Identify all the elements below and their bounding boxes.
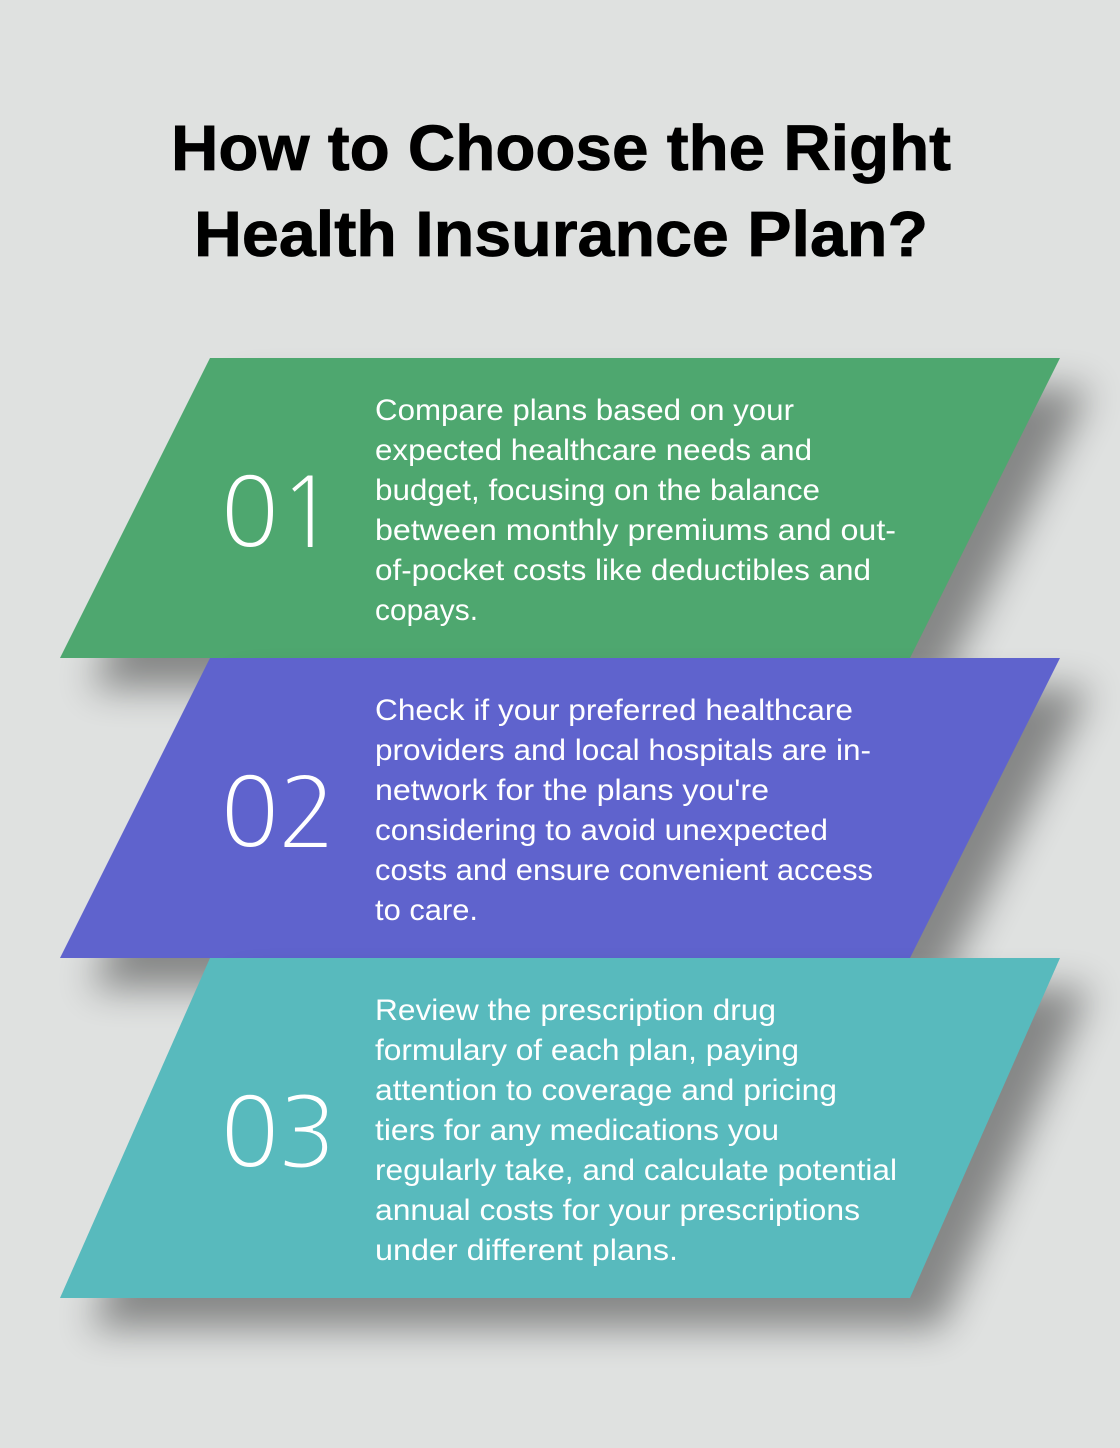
step 2 text: costs and ensure convenient access [375, 854, 873, 887]
title: Health Insurance Plan? [194, 198, 928, 270]
step 3 text [375, 994, 897, 1267]
step 3 text: regularly take, and calculate potential [375, 1154, 897, 1187]
step 3 text: annual costs for your prescriptions [375, 1194, 860, 1227]
step 3 text: Review the prescription drug [375, 994, 776, 1027]
step 1 green parallelogram [60, 358, 1060, 658]
step 3 text: attention to coverage and pricing [375, 1074, 837, 1107]
step 2 purple parallelogram [60, 658, 1060, 958]
step 1 text: copays. [375, 594, 478, 627]
step 1 text: of-pocket costs like deductibles and [375, 554, 871, 587]
step 3 text: under different plans. [375, 1234, 678, 1267]
step 2 text: providers and local hospitals are in- [375, 734, 871, 767]
step 1 text [375, 394, 896, 627]
step 2 text: network for the plans you're [375, 774, 769, 807]
panel: step 2 [60, 658, 1090, 988]
step 1 text: expected healthcare needs and [375, 434, 812, 467]
step 2 text: Check if your preferred healthcare [375, 694, 853, 727]
panel: step 3 [60, 958, 1090, 1328]
title [171, 112, 951, 270]
step 1 text: budget, focusing on the balance [375, 474, 820, 507]
panel: step 1 [60, 358, 1090, 688]
step 3 text: tiers for any medications you [375, 1114, 779, 1147]
step 2 text: considering to avoid unexpected [375, 814, 828, 847]
title: How to Choose the Right [171, 112, 951, 184]
step 2 number: 02 [220, 764, 335, 862]
step 2 text [375, 694, 873, 927]
step 2 text: to care. [375, 894, 478, 927]
step 3 text: formulary of each plan, paying [375, 1034, 799, 1067]
step 3 teal parallelogram [60, 958, 1060, 1298]
step 1 text: between monthly premiums and out- [375, 514, 896, 547]
step 3 number: 03 [220, 1084, 335, 1182]
step 1 text: Compare plans based on your [375, 394, 794, 427]
step 1 number: 01 [220, 464, 335, 562]
